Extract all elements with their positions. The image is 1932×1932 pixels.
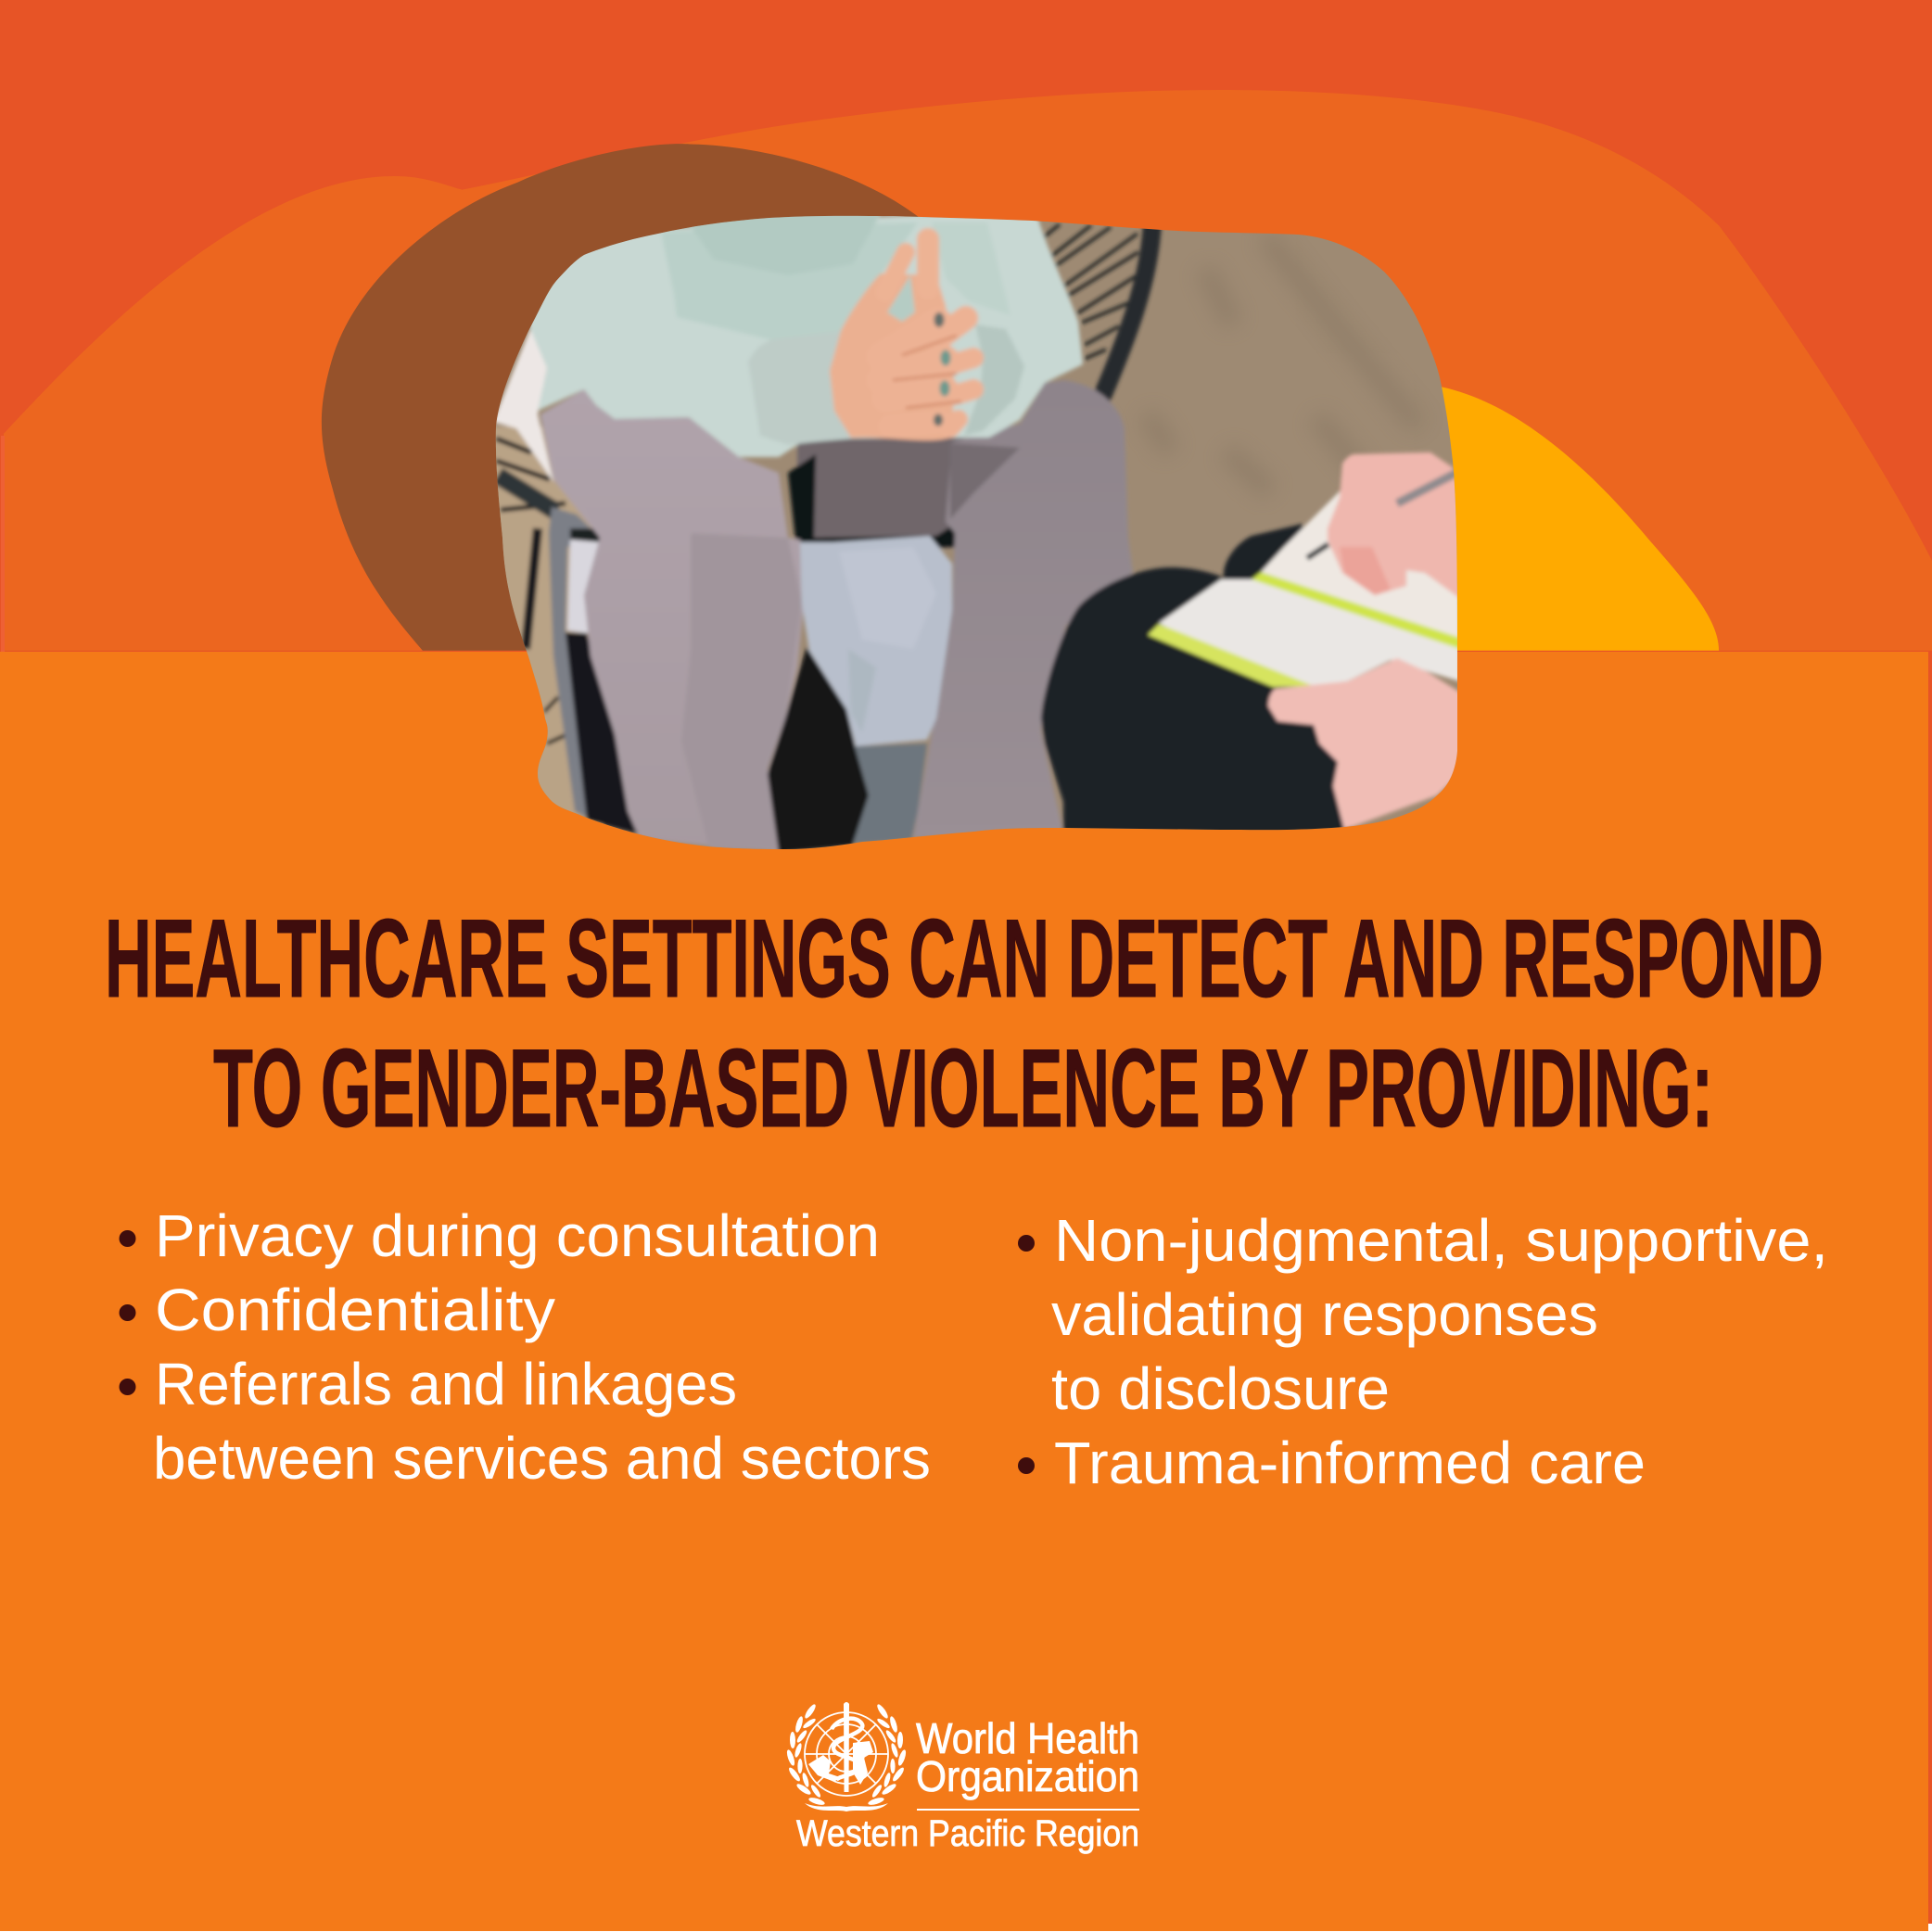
right trouser leg (913, 380, 1133, 838)
writing hand (1328, 452, 1465, 603)
bullet list: left column: between services and sectors (153, 1425, 931, 1492)
bullet list: left column: Privacy during consultation (155, 1202, 880, 1269)
right cuff (964, 324, 1024, 436)
supporting hand (1268, 658, 1465, 830)
emblem staff and serpent (832, 1702, 862, 1792)
emblem globe (805, 1712, 888, 1796)
shape: brown blob (322, 144, 936, 651)
grey blanket (800, 536, 952, 746)
interlaced fingers (944, 304, 985, 439)
floor streaks (1153, 247, 1415, 484)
raised fingers (885, 239, 928, 292)
wordmark: Organization: Organization (916, 1752, 1139, 1800)
shape: yellow blob (1435, 386, 1719, 651)
bullet list: right column: Non-judgmental, supportive, (1054, 1207, 1828, 1274)
sweatshirt chest shading (661, 213, 1010, 348)
notebook (1148, 489, 1460, 687)
bullet list: right column: to disclosure (1051, 1355, 1390, 1422)
blanket fringe (853, 744, 927, 844)
palm (830, 273, 955, 440)
title (105, 896, 1824, 1150)
emblem continents (808, 1741, 873, 1785)
bullet list: left column: Confidentiality (155, 1277, 555, 1343)
clasped hands (830, 239, 973, 440)
background organic shapes (4, 90, 1932, 651)
bullet list: right column: validating responses (1051, 1281, 1598, 1348)
left trouser leg (540, 389, 816, 853)
right chair back (1036, 222, 1152, 400)
bullet list: left column: Referrals and linkages (155, 1351, 737, 1417)
shape: orange hill (4, 90, 1932, 651)
right edge band (1928, 652, 1932, 1924)
gap between fingers (887, 275, 915, 322)
ribbon (1252, 572, 1460, 649)
icon: WHO emblem (785, 1702, 908, 1811)
left floor and chair (491, 426, 640, 853)
photo floor (491, 211, 1465, 856)
black gap beneath blanket (768, 647, 869, 853)
left cuff (748, 331, 851, 445)
centre trousers and shadow (788, 436, 964, 556)
bottom orange panel (0, 436, 1932, 1932)
lower page (1159, 579, 1460, 686)
page edge (1148, 624, 1314, 687)
pen shaft over hand (1397, 471, 1460, 503)
bullet list: right column (1018, 1207, 1828, 1496)
seated person's black trousers (1041, 524, 1354, 834)
wordmark: World Health: World Health (916, 1714, 1139, 1762)
photo: counselling session, two seated people (491, 209, 1465, 856)
bullet list: right column: Trauma-informed care (1054, 1430, 1646, 1496)
sweatshirt (528, 209, 1083, 457)
wordmark: Western Pacific Region: Western Pacific Region (796, 1813, 1139, 1854)
finger creases (893, 336, 961, 408)
wordmark rule (917, 1809, 1139, 1811)
pen tip (1307, 544, 1328, 558)
emblem ribbon (805, 1803, 888, 1811)
upper page (1261, 489, 1460, 640)
WHO logo and wordmark (785, 1702, 1139, 1854)
bullet list: left column (119, 1202, 931, 1492)
white fur throw (496, 328, 554, 482)
